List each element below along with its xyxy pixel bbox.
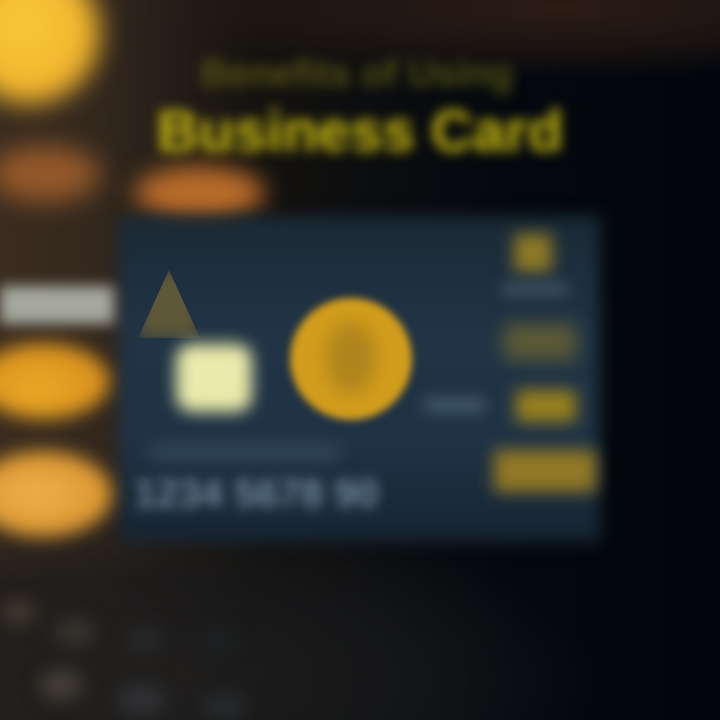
key: lower right [200, 694, 248, 718]
gold coin upper [0, 343, 110, 419]
key: lower left [40, 670, 82, 700]
icon: card chip [176, 344, 252, 412]
text: card upper line [150, 445, 340, 459]
orange coin left [0, 146, 100, 202]
icon: gold coin [284, 292, 418, 426]
text: right column label three [516, 390, 576, 422]
icon: triangle emblem [138, 270, 200, 338]
title line one: Benefits of Using [201, 53, 513, 95]
coin inner symbol [326, 322, 376, 394]
text: right column value [494, 450, 596, 492]
title [152, 53, 568, 164]
title line two: Business Card [157, 99, 563, 164]
icon: glowing sun [0, 0, 100, 104]
white bar [0, 286, 114, 324]
text: right column label one [502, 283, 568, 295]
text: card number: 1234 5678 90 [134, 472, 379, 516]
text: right column label two [504, 324, 576, 360]
panel: card [118, 216, 600, 542]
key: lower middle [118, 686, 166, 714]
icon: right column emblem [514, 234, 552, 272]
orange coin centre [135, 166, 265, 220]
text: card label beside coin [425, 398, 485, 412]
gold coin lower [0, 451, 112, 537]
key: top left [0, 600, 36, 624]
keyboard bokeh keys [0, 595, 244, 718]
key: far right [200, 630, 236, 652]
key: second [55, 618, 95, 646]
coin disc [290, 298, 412, 420]
key: third [125, 628, 163, 652]
